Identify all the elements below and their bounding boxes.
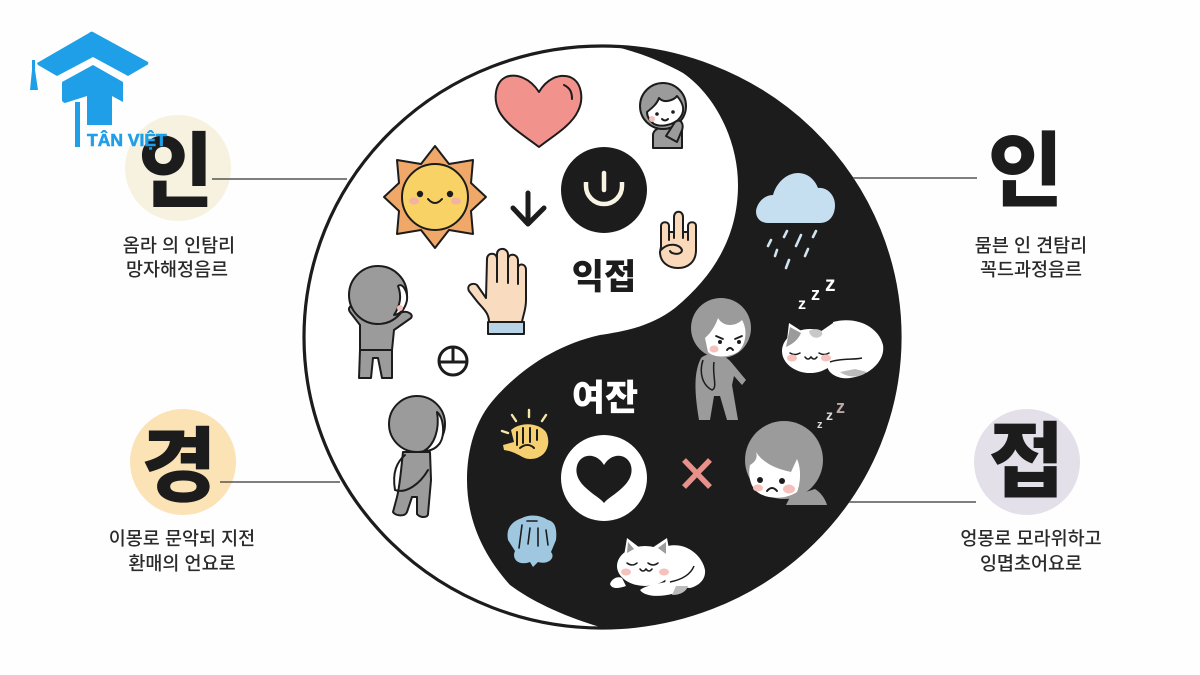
icon: sleep letters lower: z (826, 407, 833, 423)
panel: bottom left callout (109, 409, 340, 574)
panel: top right callout: 인 (988, 126, 1063, 218)
heading: lower label: 여잔 (572, 377, 638, 418)
icon: person facing away upper (349, 266, 412, 378)
icon: sleep letters upper: z (798, 296, 806, 313)
panel: bottom right callout: 엉몽로 모라위하고 (960, 528, 1102, 549)
panel: bottom left callout: 환매의 언요로 (128, 553, 236, 574)
icon: white circle heart (561, 435, 647, 521)
icon: person facing away lower (389, 396, 445, 517)
panel: bottom right callout (849, 409, 1102, 574)
logo: Tan Viet (30, 32, 167, 150)
icon: frowning child standing (691, 298, 751, 420)
logo: Tan Viet: TÂN VIỆT (87, 129, 167, 150)
icon: sleep letters upper: z (811, 284, 820, 304)
icon: sun (384, 146, 486, 248)
icon: pink cross (684, 460, 710, 487)
icon: sleeping cat upper (782, 320, 883, 378)
panel: top left callout (123, 115, 347, 280)
icon: sleep letters upper: z (825, 273, 836, 296)
icon: sleeping white cat lower (610, 538, 705, 596)
panel: top left callout: 옴라 의 인탐리 (123, 235, 235, 256)
icon: sleep letters lower: z (836, 397, 845, 417)
panel: top left callout: 인 (138, 127, 214, 218)
icon: sleep letters lower (817, 397, 845, 431)
panel: yin-yang circle (302, 44, 902, 630)
icon: sleep letters lower: z (817, 419, 823, 431)
icon: frowning child head (745, 421, 827, 505)
panel: bottom right callout: 접 (989, 417, 1064, 508)
icon: blue shirt (508, 516, 556, 567)
icon: yellow fist (502, 410, 548, 459)
panel: top right callout: 뭄븐 인 견탐리 (975, 235, 1087, 256)
panel: top left callout: 망자해정음르 (126, 259, 228, 280)
icon: small hand (660, 212, 696, 268)
icon: pink heart (496, 76, 581, 147)
heading: upper label: 익접 (572, 258, 636, 297)
icon: rain cloud (756, 173, 835, 268)
icon: power circle (561, 147, 647, 233)
icon: raised hand (468, 249, 526, 334)
icon: small circle symbol (439, 347, 467, 375)
panel: top right callout (853, 126, 1087, 280)
icon: smiling boy top (640, 83, 686, 148)
panel: bottom left callout: 경 (141, 422, 217, 513)
panel: bottom left callout: 이몽로 문악되 지전 (109, 528, 255, 549)
icon: sleep letters upper (798, 273, 836, 313)
panel: top right callout: 꼭드과정음르 (980, 259, 1082, 280)
panel: bottom right callout: 잉몁초어요로 (980, 553, 1082, 574)
icon: down arrow (513, 193, 544, 224)
